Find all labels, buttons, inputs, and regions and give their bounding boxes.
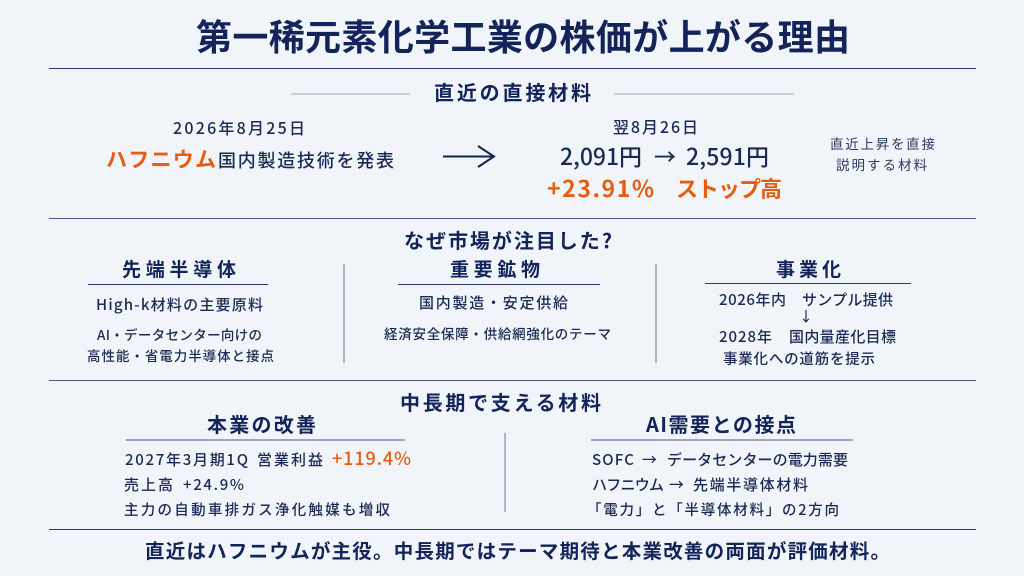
column: advanced semiconductors: AI・データセンター向けの	[97, 324, 262, 344]
column: core business improvement: 2027年3月期1Q	[125, 449, 248, 470]
column: core business improvement	[124, 409, 411, 520]
column: commercialization: サンプル提供	[802, 289, 893, 310]
column: AI demand connection: データセンターの電力需要	[667, 449, 848, 470]
column: core business improvement: 主力の自動車排ガス浄化触媒も増収	[124, 499, 390, 520]
heading: medium-term support: 中長期で支える材料	[400, 387, 601, 416]
heading: direct catalyst: 直近の直接材料	[434, 77, 591, 106]
title: 第一稀元素化学工業の株価が上がる理由	[196, 9, 850, 61]
price change: 2,091円	[560, 138, 642, 172]
column: critical minerals: 国内製造・安定供給	[419, 292, 568, 313]
date: announcement: 2026年8月25日	[173, 115, 305, 139]
percent change and limit-up: +23.91%	[547, 170, 654, 204]
side note: 説明する材料	[836, 154, 928, 174]
column: commercialization: 国内量産化目標	[789, 326, 896, 347]
side note	[830, 133, 935, 174]
column: critical minerals: 経済安全保障・供給網強化のテーマ	[384, 323, 611, 343]
heading: why the market noticed: なぜ市場が注目した?	[404, 225, 612, 254]
column: AI demand connection: SOFC	[592, 449, 634, 470]
column: commercialization: 事業化への道筋を提示	[723, 348, 875, 369]
arrow: announcement to result	[443, 146, 494, 167]
column: commercialization: 事業化	[776, 255, 841, 282]
panel: direct catalyst	[106, 77, 935, 204]
column: advanced semiconductors: High-k材料の主要原料	[96, 294, 263, 315]
highlight: hafnium: ハフニウム	[106, 144, 216, 174]
date: next day: 翌8月26日	[613, 114, 698, 138]
column: critical minerals: 重要鉱物	[450, 255, 540, 282]
column: core business improvement: 売上高	[124, 474, 173, 495]
column: critical minerals	[384, 255, 611, 343]
footer conclusion: 直近はハフニウムが主役。中長期ではテーマ期待と本業改善の両面が評価材料。	[145, 535, 890, 564]
column: core business improvement: +24.9%	[183, 474, 244, 495]
column: commercialization: 2026年内	[719, 289, 786, 310]
column: commercialization	[705, 255, 911, 369]
panel: medium-term support	[124, 387, 853, 520]
percent change and limit-up	[547, 170, 782, 204]
percent change and limit-up: ストップ高	[676, 172, 782, 204]
column: AI demand connection: →	[642, 449, 657, 470]
column: AI demand connection: →	[669, 474, 684, 495]
price change: 2,591円	[686, 138, 769, 172]
column: core business improvement: +119.4%	[332, 445, 411, 471]
column: AI demand connection: 「電力」と「半導体材料」の2方向	[587, 499, 839, 520]
column: AI demand connection: AI需要との接点	[645, 409, 796, 438]
panel: why the market noticed	[87, 225, 911, 369]
column: advanced semiconductors	[87, 255, 274, 365]
column: core business improvement: 本業の改善	[207, 409, 316, 438]
column: AI demand connection: 先端半導体材料	[693, 474, 808, 495]
column: commercialization: ↓	[799, 307, 813, 327]
price change: →	[654, 140, 676, 172]
column: advanced semiconductors: 先端半導体	[122, 255, 236, 282]
price change	[560, 138, 769, 172]
text: announcement: 国内製造技術を発表	[218, 147, 394, 173]
column: core business improvement: 営業利益	[257, 449, 323, 470]
column: AI demand connection	[587, 409, 853, 520]
column: AI demand connection: ハフニウム	[592, 474, 664, 495]
column: advanced semiconductors: 高性能・省電力半導体と接点	[87, 345, 274, 365]
side note: 直近上昇を直接	[830, 133, 935, 153]
column: commercialization: 2028年	[719, 326, 772, 347]
